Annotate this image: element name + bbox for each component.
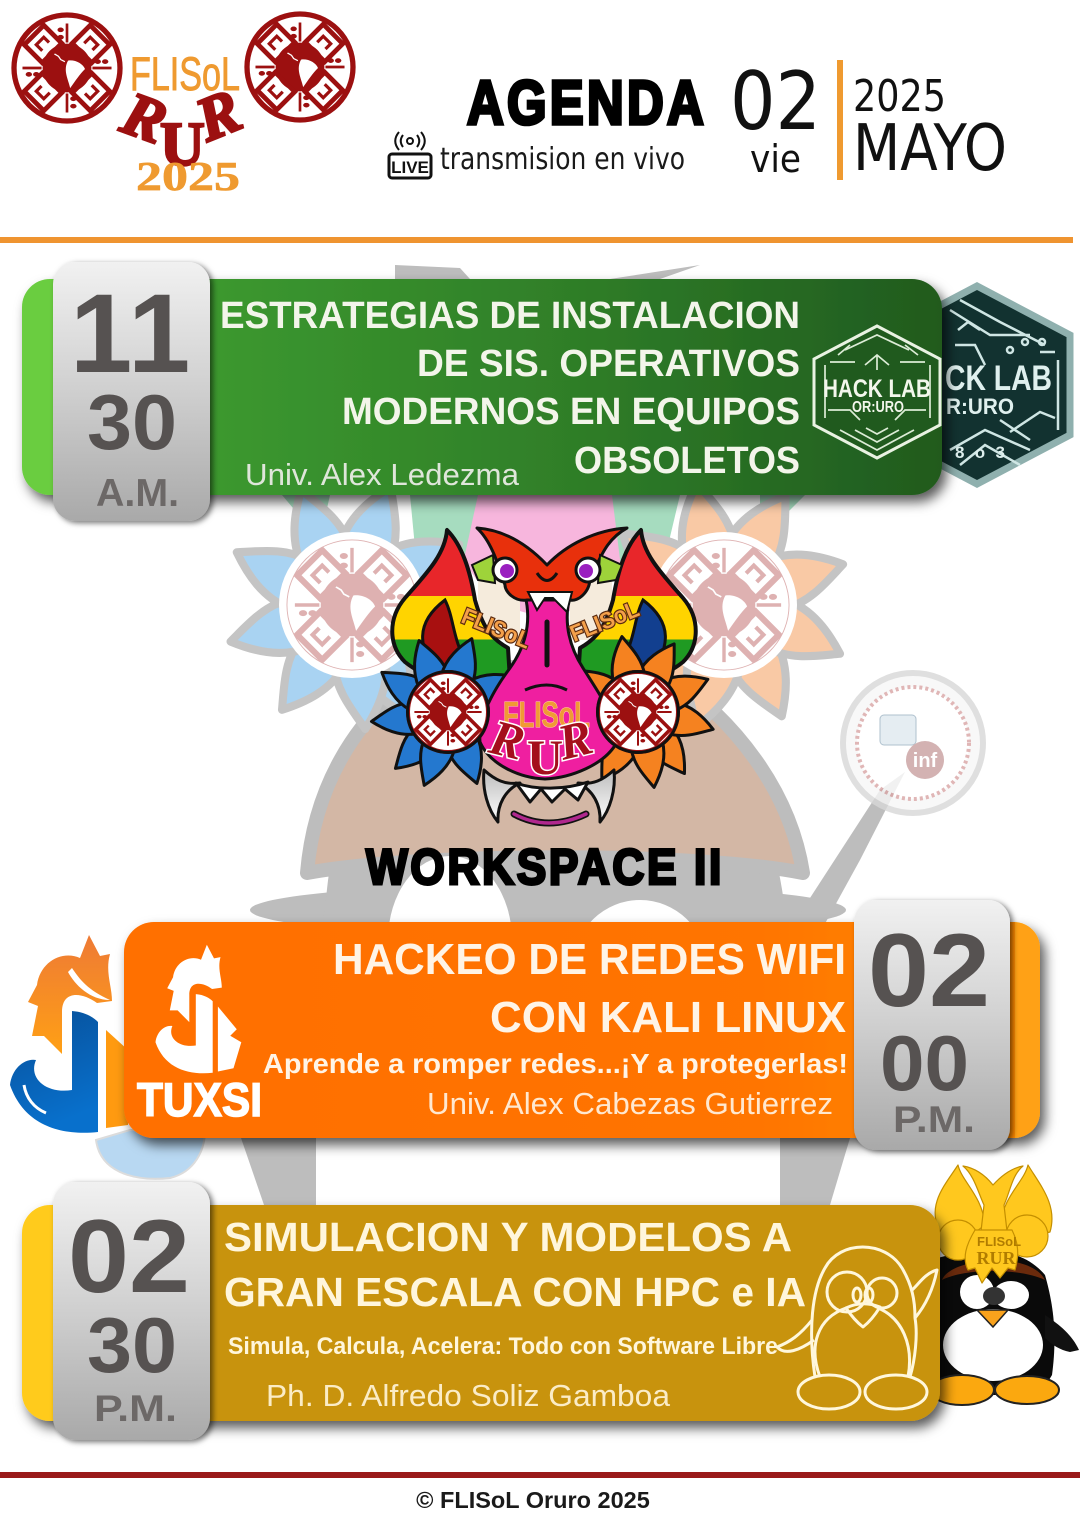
logo word FLISoL: FLISoL bbox=[130, 47, 240, 100]
centre RUR word: R bbox=[551, 708, 598, 771]
date: year: 2025 bbox=[853, 71, 946, 122]
meridiem: P.M. bbox=[893, 1099, 975, 1140]
seal outer ring bbox=[843, 673, 983, 813]
title: HACKEO DE REDES WIFI bbox=[333, 935, 846, 984]
penguin body bbox=[925, 1251, 1054, 1395]
watermark: left sun medallion bbox=[284, 537, 420, 673]
dragon mask illustration bbox=[369, 528, 717, 823]
title bbox=[224, 1214, 806, 1315]
right pupil bbox=[579, 564, 593, 578]
left petals bbox=[369, 633, 523, 791]
hour: 02 bbox=[868, 913, 990, 1029]
seal inner ring bbox=[857, 687, 969, 799]
watermark: right disc rim bbox=[655, 536, 793, 674]
left banner word: FLISoL bbox=[458, 603, 535, 654]
pink body bbox=[480, 595, 617, 779]
icon: right medallion bbox=[247, 14, 353, 120]
badge circuit lines bbox=[950, 300, 1058, 465]
logo word RUR bbox=[112, 76, 251, 179]
blue note body bbox=[10, 1011, 98, 1133]
watermark: penguin body bbox=[241, 265, 905, 1205]
right flame horn bbox=[578, 530, 696, 680]
left eye bbox=[960, 1275, 994, 1309]
title: ESTRATEGIAS DE INSTALACION bbox=[220, 295, 800, 337]
footer copyright: © FLISoL Oruro 2025 bbox=[416, 1487, 650, 1513]
meridiem: P.M. bbox=[94, 1388, 177, 1429]
right medallion bbox=[598, 672, 678, 752]
watermark: hat band bbox=[307, 672, 803, 873]
icon: white fox bbox=[156, 945, 241, 1073]
badge subtitle: R:URO bbox=[946, 394, 1014, 419]
penguin flipper bbox=[1045, 1315, 1079, 1352]
red head bbox=[477, 528, 627, 600]
heading: AGENDA: AGENDA bbox=[467, 69, 707, 138]
panel body bbox=[22, 1205, 940, 1421]
watermark: faded penguin with dragon headdress bbox=[224, 265, 905, 1205]
pale fox tail bbox=[96, 1130, 205, 1179]
mouth bar color bbox=[514, 814, 586, 823]
centre RUR word bbox=[483, 708, 598, 785]
TUXSI wordmark: TUXSI bbox=[137, 1073, 262, 1126]
title: OBSOLETOS bbox=[574, 440, 800, 482]
minutes: 30 bbox=[87, 378, 177, 466]
gold right sun bbox=[1006, 1215, 1048, 1257]
speaker: Univ. Alex Ledezma bbox=[245, 457, 520, 492]
mouth bar bbox=[514, 814, 586, 823]
penguin mascot with golden headdress bbox=[925, 1165, 1079, 1405]
brown hat bbox=[942, 1260, 1045, 1280]
title bbox=[333, 935, 846, 1042]
live icon bbox=[389, 132, 431, 178]
hour: 11 bbox=[70, 271, 190, 396]
heading: WORKSPACE II: WORKSPACE II bbox=[366, 840, 724, 896]
left flame horn bbox=[392, 530, 510, 680]
left inner flame bbox=[423, 600, 470, 680]
watermark: left sun petals bbox=[224, 478, 477, 732]
badge name: CK LAB bbox=[945, 359, 1052, 398]
left medallion rim bbox=[408, 672, 488, 752]
speaker: Ph. D. Alfredo Soliz Gamboa bbox=[266, 1378, 671, 1413]
seal inf mark bbox=[906, 741, 944, 779]
watermark: right sun disc bbox=[651, 532, 797, 678]
right eyelash bbox=[598, 555, 622, 583]
title: SIMULACION Y MODELOS A bbox=[224, 1214, 792, 1260]
date divider bbox=[837, 60, 843, 180]
seal monitor bbox=[880, 715, 916, 745]
gold chin bbox=[965, 1230, 1018, 1283]
centre FLISoL word: FLISoL bbox=[503, 694, 590, 735]
hour: 02 bbox=[68, 1199, 190, 1315]
box shape bbox=[53, 1182, 210, 1440]
icon: Hack Lab outer badge bbox=[884, 286, 1070, 484]
panel: session 02:30 P.M. bbox=[22, 1182, 940, 1440]
nose bbox=[983, 1287, 1005, 1305]
minutes: 30 bbox=[87, 1301, 177, 1389]
title: CON KALI LINUX bbox=[490, 993, 846, 1042]
brow line bbox=[525, 685, 567, 690]
beak bbox=[977, 1310, 1008, 1327]
seal: INF logo bbox=[843, 673, 983, 813]
subtitle: Aprende a romper redes...¡Y a protegerlas! bbox=[263, 1048, 848, 1079]
gold right flame bbox=[1000, 1165, 1052, 1240]
logo year 2025: 2025 bbox=[136, 153, 240, 199]
right petals bbox=[563, 633, 717, 791]
tail swirl bbox=[24, 1085, 46, 1113]
inner name: HACK LAB bbox=[823, 375, 931, 403]
inner hexagon bbox=[814, 326, 940, 458]
speaker: Univ. Alex Cabezas Gutierrez bbox=[427, 1086, 833, 1121]
meridiem: A.M. bbox=[96, 472, 179, 515]
live label: LIVE bbox=[391, 158, 429, 177]
badge number: 8 o 3 bbox=[955, 443, 1005, 462]
logo: FLISoL RUR 2025 bbox=[14, 14, 353, 199]
left eyelash bbox=[472, 555, 495, 583]
panel body bbox=[22, 279, 942, 495]
box shape bbox=[854, 900, 1010, 1150]
seal inf label: inf bbox=[913, 750, 938, 772]
right eye bbox=[576, 558, 600, 582]
watermark: left sun disc bbox=[279, 532, 425, 678]
headdress label: FLISoL bbox=[977, 1234, 1021, 1249]
date: day number: 02 bbox=[730, 55, 821, 148]
nose line bbox=[544, 622, 550, 665]
top orange rule bbox=[0, 237, 1073, 243]
watermark: right sun petals bbox=[598, 478, 851, 732]
badge hexagon bbox=[884, 286, 1070, 484]
watermark: pale dragon bbox=[282, 425, 805, 640]
icon: left medallion bbox=[14, 15, 120, 121]
left pupil bbox=[500, 564, 514, 578]
left medallion bbox=[408, 672, 488, 752]
right foot bbox=[995, 1376, 1059, 1404]
gold head bbox=[963, 1166, 1023, 1240]
right medallion rim bbox=[598, 672, 678, 752]
box shape bbox=[53, 262, 210, 521]
right flame tail bbox=[106, 1030, 128, 1128]
minutes: 00 bbox=[880, 1019, 969, 1107]
date: month: MAYO bbox=[853, 112, 1007, 186]
penguin belly bbox=[943, 1309, 1043, 1381]
time box bbox=[53, 1182, 210, 1440]
logo word RUR: R bbox=[112, 79, 175, 157]
watermark: white belly gap bbox=[316, 1138, 780, 1205]
icon: penguin outline bbox=[777, 1247, 937, 1409]
logo word RUR: R bbox=[186, 76, 251, 155]
title bbox=[220, 295, 800, 482]
centre RUR word: R bbox=[483, 708, 530, 771]
watermark: right sun medallion bbox=[656, 537, 792, 673]
headdress RUR: RUR bbox=[976, 1248, 1016, 1268]
right inner flame bbox=[618, 600, 665, 680]
time box bbox=[854, 900, 1010, 1150]
upper teeth bbox=[528, 592, 572, 612]
live signal waves bbox=[395, 132, 425, 150]
inner subtitle: OR:URO bbox=[852, 399, 904, 416]
live badge bbox=[389, 154, 431, 178]
gold left sun bbox=[938, 1220, 978, 1260]
bottom dark-red rule bbox=[0, 1472, 1080, 1478]
watermark: penguin eyes bbox=[388, 856, 706, 1030]
right banner word: FLISoL bbox=[566, 596, 643, 647]
gold left flame bbox=[935, 1165, 985, 1240]
golden headdress bbox=[935, 1165, 1052, 1283]
lower fangs bbox=[484, 770, 614, 822]
right eye bbox=[993, 1281, 1029, 1309]
title: GRAN ESCALA CON HPC e IA bbox=[224, 1269, 806, 1315]
panel body bbox=[124, 922, 1040, 1138]
orange fox body bbox=[28, 935, 112, 1054]
icon: Hack Lab inner badge bbox=[814, 326, 940, 458]
date: weekday: vie bbox=[750, 137, 801, 181]
left foot bbox=[930, 1375, 994, 1405]
panel: session 11:30 A.M. bbox=[22, 262, 942, 521]
title: MODERNOS EN EQUIPOS bbox=[342, 391, 800, 433]
text: transmision en vivo: transmision en vivo bbox=[440, 142, 685, 177]
inner circuit lines bbox=[825, 335, 930, 450]
watermark: left disc rim bbox=[283, 536, 421, 674]
subtitle: Simula, Calcula, Acelera: Todo con Software Libre bbox=[228, 1333, 778, 1360]
centre RUR word: U bbox=[527, 729, 563, 785]
fox face stripe bbox=[68, 968, 110, 1000]
time box bbox=[53, 262, 210, 521]
title: DE SIS. OPERATIVOS bbox=[417, 343, 800, 385]
panel: session 02:00 P.M. bbox=[124, 900, 1040, 1150]
icon: TUXSI fox outer logo bbox=[10, 935, 205, 1179]
left eye bbox=[493, 558, 517, 582]
logo word RUR: U bbox=[160, 111, 205, 179]
smile bbox=[537, 573, 557, 580]
